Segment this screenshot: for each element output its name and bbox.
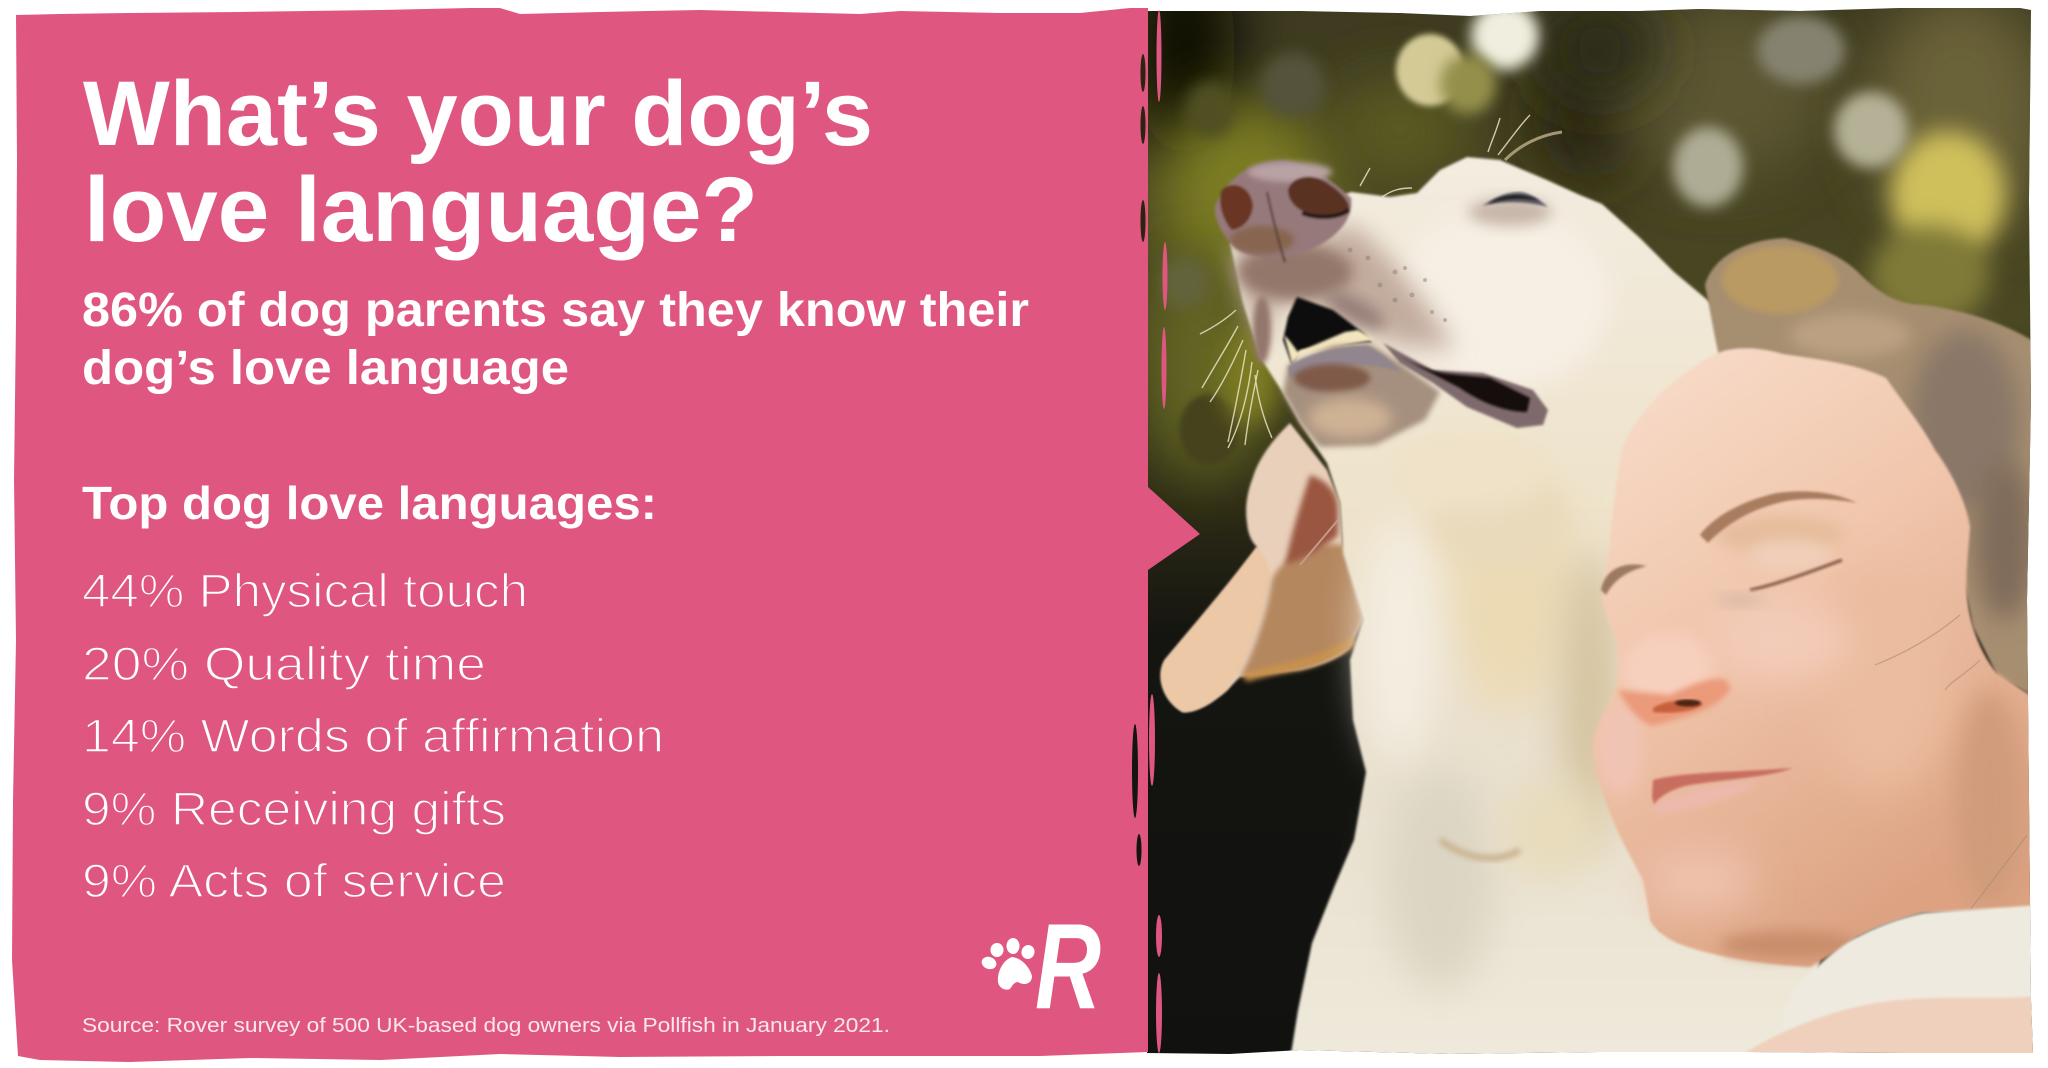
subtitle: 86% of dog parents say they know their <box>82 284 1029 337</box>
panel: pink torn paper <box>12 8 1200 1062</box>
title <box>83 63 873 261</box>
photo background <box>1140 0 2040 1068</box>
dog body and head <box>1215 157 1820 1060</box>
pink panel shape <box>12 8 1200 1062</box>
closed eye <box>1716 540 1842 606</box>
title: love language? <box>84 159 758 261</box>
brush edge <box>1132 10 1168 1053</box>
stray hair strands <box>1875 615 2027 910</box>
subtitle <box>82 284 1029 395</box>
dog eye <box>1468 192 1552 226</box>
dog mouth <box>1283 297 1548 447</box>
muzzle shading <box>1232 225 1455 350</box>
list of love languages: 9% Acts of service <box>82 854 506 907</box>
dog nose <box>1215 160 1351 262</box>
title: What’s your dog’s <box>83 63 873 165</box>
logo <box>980 898 1101 1034</box>
woman <box>1593 238 2040 1060</box>
eyebrows <box>1601 491 1857 595</box>
face shading <box>1852 695 1934 782</box>
face <box>1593 348 2040 967</box>
logo letter: R <box>1035 898 1101 1034</box>
photo: dog and woman cuddling <box>1135 0 2048 1068</box>
list of love languages <box>82 564 664 907</box>
sweater and arm <box>1740 905 2040 1060</box>
hair bun and hair <box>1705 238 2040 700</box>
dog ear <box>1161 423 1363 712</box>
muzzle speckles <box>1348 248 1447 322</box>
list of love languages: 20% Quality time <box>82 637 486 690</box>
icon: paw <box>980 938 1036 990</box>
list of love languages: 9% Receiving gifts <box>82 782 506 835</box>
list heading: Top dog love languages: <box>82 477 657 529</box>
list of love languages: 14% Words of affirmation <box>82 709 664 762</box>
fur shading <box>1446 548 1570 714</box>
lips <box>1652 768 1793 815</box>
source note: Source: Rover survey of 500 UK-based dog owners via Pollfish in January 2021. <box>82 1015 890 1037</box>
background bokeh lights <box>1135 0 2048 480</box>
woman nose <box>1618 632 1730 726</box>
list of love languages: 44% Physical touch <box>82 564 528 617</box>
muzzle whiskers <box>1200 115 1562 448</box>
subtitle: dog’s love language <box>82 342 569 395</box>
